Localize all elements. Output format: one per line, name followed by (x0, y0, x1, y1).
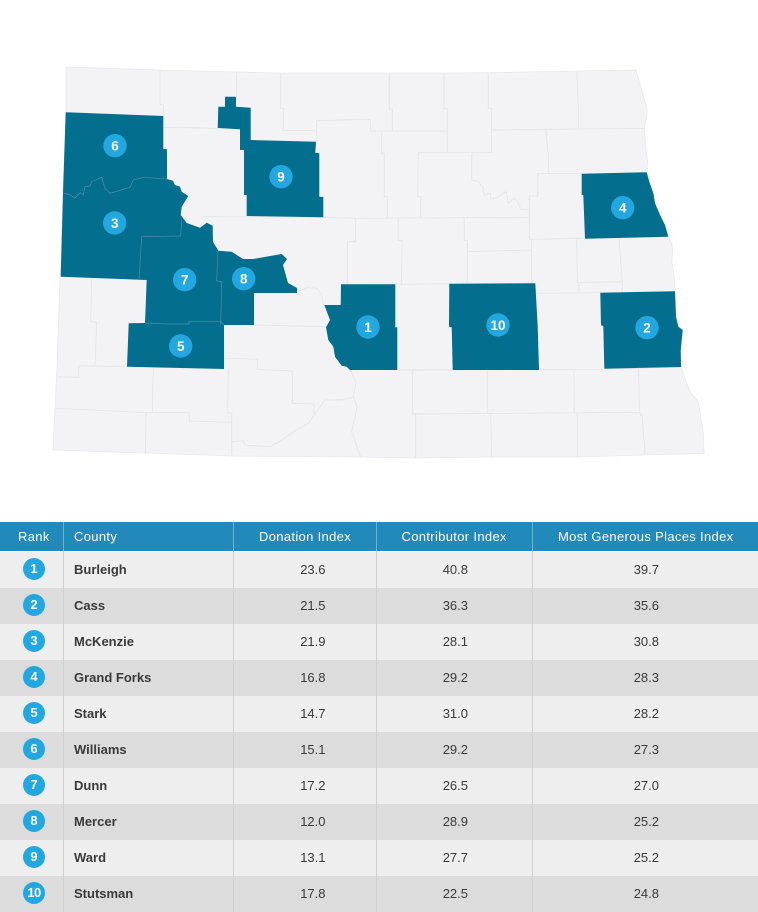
row 9: Ward (74, 850, 106, 865)
badge 3: 3 (111, 216, 119, 231)
badge 1: 1 (364, 320, 372, 335)
row 8: 12.0 (300, 814, 326, 829)
row 8: 25.2 (634, 814, 659, 829)
row 10: 10 (27, 885, 41, 900)
row 9: 25.2 (634, 850, 659, 865)
row 1: 39.7 (634, 562, 659, 577)
row 3 (0, 624, 758, 660)
row 1: Burleigh (74, 562, 127, 577)
row 2: Cass (74, 598, 105, 613)
badge 5: 5 (177, 339, 185, 354)
badge 1 (356, 315, 380, 339)
row 4: 4 (30, 669, 38, 684)
row 3: McKenzie (74, 634, 134, 649)
badge 9: 9 (277, 170, 285, 184)
badge 10 (486, 313, 510, 337)
map: North Dakota counties (52, 66, 704, 458)
map badges (103, 134, 659, 358)
row 5: 14.7 (300, 706, 326, 721)
highlighted county: Ward (218, 97, 323, 217)
row 10: Stutsman (74, 886, 133, 901)
row 2: 36.3 (443, 598, 468, 613)
row 6 (0, 732, 758, 768)
county borders (56, 70, 681, 457)
badge 9 (269, 165, 293, 188)
row 2: 35.6 (634, 598, 659, 613)
row 1: 40.8 (443, 562, 468, 577)
row 8: 8 (30, 813, 38, 828)
row 9: 27.7 (443, 850, 468, 865)
row 4: 29.2 (443, 670, 468, 685)
row 4: Grand Forks (74, 670, 151, 685)
row 3: 21.9 (300, 634, 326, 649)
row 9 (0, 840, 758, 876)
row 7: 17.2 (300, 778, 326, 793)
highlighted western counties: Williams, McKenzie, Dunn, Mercer, Stark (61, 112, 297, 369)
row 10: 17.8 (300, 886, 326, 901)
badge 3 (103, 211, 126, 235)
table header: Rank (18, 529, 50, 544)
row 10: 24.8 (634, 886, 659, 901)
badge 6: 6 (111, 138, 119, 154)
row 4 (0, 660, 758, 696)
row 1: 23.6 (300, 562, 326, 577)
row 3: 28.1 (443, 634, 468, 649)
badge 2 (635, 316, 659, 339)
row 8: Mercer (74, 814, 117, 829)
badge 6 (103, 134, 127, 157)
row 10 (0, 876, 758, 912)
row 1 (0, 552, 758, 588)
row 5: 31.0 (443, 706, 468, 721)
row 3: 30.8 (634, 634, 659, 649)
table header (0, 522, 758, 551)
highlighted county: Grand Forks (582, 172, 668, 239)
row 5: 5 (30, 705, 38, 720)
table header: Most Generous Places Index (558, 529, 734, 544)
table header: Contributor Index (402, 529, 507, 544)
row 6: 6 (30, 741, 38, 756)
row 4: 28.3 (634, 670, 659, 685)
table header: County (74, 529, 117, 544)
row 8: 28.9 (443, 814, 468, 829)
row 9: 13.1 (300, 850, 326, 865)
row 7: Dunn (74, 778, 107, 793)
highlighted county: Burleigh (324, 284, 397, 370)
row 7: 27.0 (634, 778, 659, 793)
row 5: 28.2 (634, 706, 659, 721)
badge 10: 10 (490, 318, 506, 333)
row 10: 22.5 (443, 886, 468, 901)
row 7: 26.5 (443, 778, 468, 793)
badge 8: 8 (240, 272, 248, 286)
badge 7 (173, 268, 196, 291)
row 4: 16.8 (300, 670, 326, 685)
row 6: 15.1 (300, 742, 326, 757)
badge 2: 2 (643, 320, 651, 336)
badge 4 (611, 196, 634, 219)
row 2: 2 (30, 597, 38, 612)
row 6: Williams (74, 742, 127, 757)
table header: Donation Index (259, 529, 351, 544)
row 2: 21.5 (300, 598, 326, 613)
row 7: 7 (30, 777, 38, 792)
highlighted county: Cass (600, 291, 683, 369)
state outline (53, 67, 704, 458)
badge 4: 4 (619, 200, 627, 216)
row 1: 1 (30, 561, 38, 576)
row 5: Stark (74, 706, 107, 721)
row 6: 27.3 (634, 742, 659, 757)
row 2 (0, 588, 758, 624)
highlighted county: Stutsman (449, 283, 539, 370)
row 6: 29.2 (443, 742, 468, 757)
row 7 (0, 768, 758, 804)
row 3: 3 (30, 633, 38, 648)
badge 5 (169, 334, 192, 358)
row 8 (0, 804, 758, 840)
badge 8 (232, 267, 255, 290)
row 9: 9 (30, 849, 38, 864)
row 5 (0, 696, 758, 732)
ranking table (0, 522, 758, 912)
badge 7: 7 (181, 272, 188, 288)
